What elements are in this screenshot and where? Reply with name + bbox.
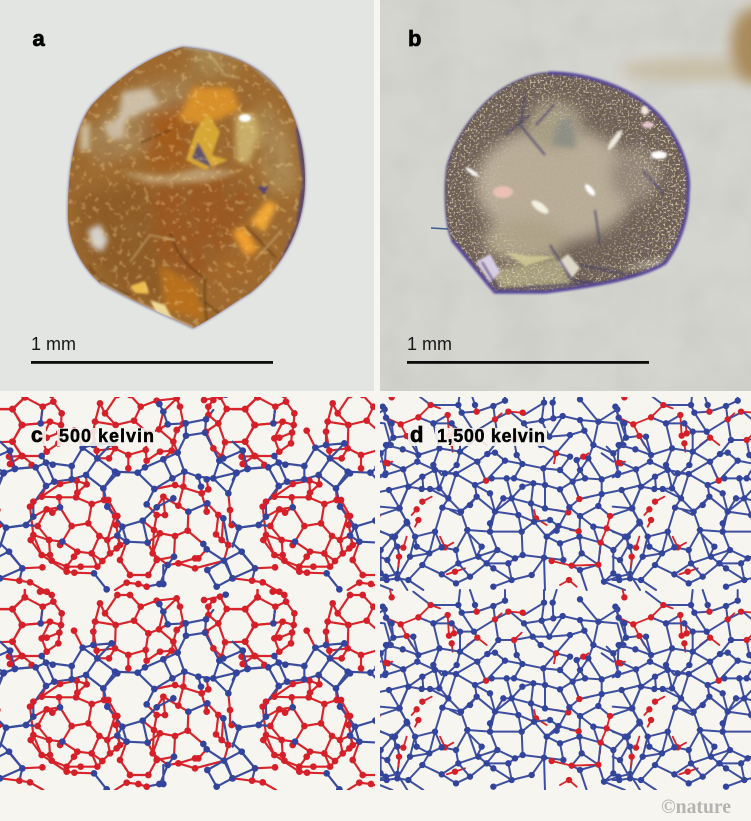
panel d: atomic network at 1,500 kelvin <box>380 397 751 790</box>
scale bar b: 1 mm <box>407 334 452 354</box>
panel b: photograph of translucent specimen <box>380 0 751 391</box>
panel label c: 500 kelvin <box>28 424 155 447</box>
photo a background <box>0 0 374 391</box>
panel label d: 1,500 kelvin <box>408 422 547 447</box>
panel label d: 1,500 kelvin: d <box>410 422 423 447</box>
panel label d: 1,500 kelvin: 1,500 kelvin <box>437 426 545 446</box>
network diagram c <box>0 397 375 790</box>
scale bar a: 1 mm <box>31 334 76 354</box>
out-of-focus tan blob, top right <box>620 7 751 83</box>
panel a: photograph of brown specimen <box>0 0 374 391</box>
specimen b: round crystal with purple rim <box>431 70 692 296</box>
photo b background <box>380 0 751 391</box>
network diagram d <box>380 397 751 790</box>
panel label c: 500 kelvin: c <box>31 424 43 447</box>
panel letter b: b <box>408 26 421 51</box>
panel label c: 500 kelvin: 500 kelvin <box>59 426 154 446</box>
credit: nature: ©nature <box>661 796 731 818</box>
panel letter a: a <box>32 26 46 51</box>
specimen a: golden brown crystal <box>60 40 310 330</box>
panel c: atomic network at 500 kelvin <box>0 397 375 790</box>
